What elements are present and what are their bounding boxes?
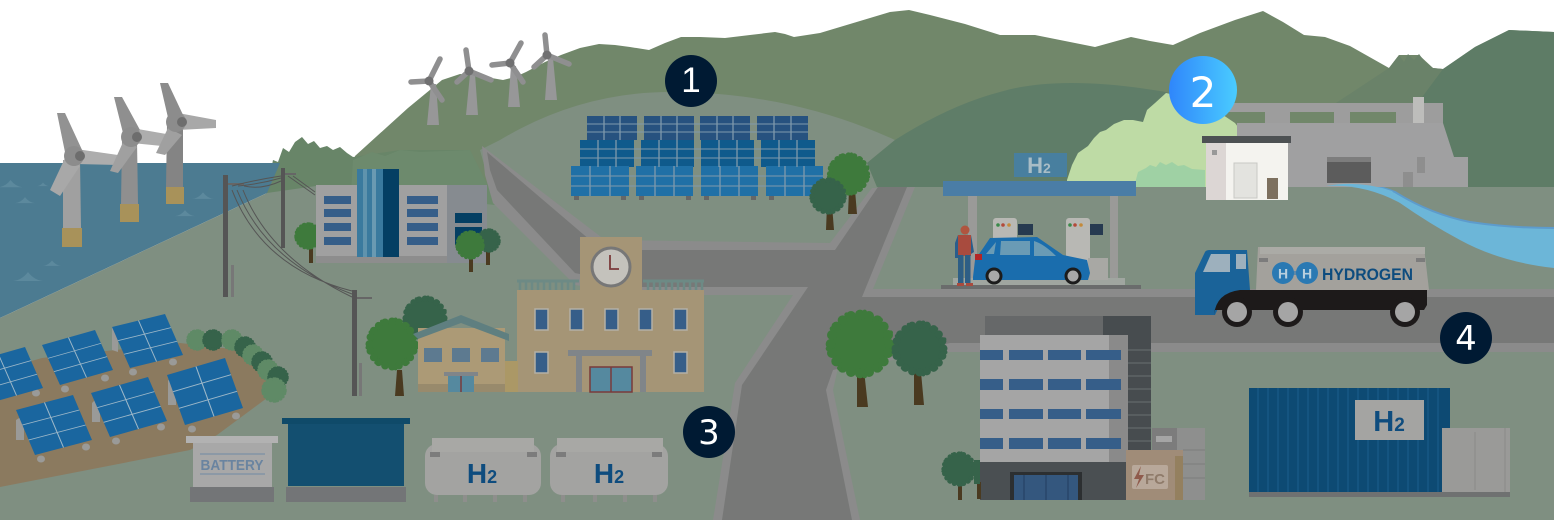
truck logo: H [1278, 266, 1288, 282]
hydrogen tank 1: H2 [467, 458, 497, 489]
river overlap at factory [1326, 184, 1400, 200]
clock [592, 248, 630, 286]
trees by office building [294, 220, 501, 272]
marker 3 [683, 406, 735, 458]
utility poles and wires [223, 168, 372, 396]
middle mountain behind factory [1336, 54, 1443, 105]
battery unit: BATTERY [200, 457, 264, 474]
blue storage unit [282, 418, 410, 502]
attendant [955, 226, 982, 286]
forest hill [265, 137, 500, 220]
hydrogen container [1249, 388, 1510, 497]
container sign: H2 [1373, 406, 1405, 438]
hydrogen tank 2: H2 [594, 458, 624, 489]
station sign: H2 [1027, 153, 1051, 178]
background mountains [355, 10, 1554, 190]
hydrogen tank 1 [425, 438, 541, 502]
factory [1226, 97, 1468, 187]
hydrogen production hut [1202, 136, 1291, 200]
grey unit [1152, 428, 1205, 500]
wind farm on hill [411, 35, 569, 125]
hillside solar array [0, 314, 289, 487]
front mountain [867, 83, 1250, 187]
small trees by tower [941, 451, 981, 500]
dispensers [993, 218, 1108, 280]
offshore wind turbine 2 [110, 97, 172, 222]
roads [482, 146, 1554, 520]
battery unit [186, 436, 278, 502]
main solar farm [571, 116, 823, 200]
marker 1 [665, 55, 717, 107]
marker 1: 1 [681, 61, 701, 100]
truck logo: H [1302, 266, 1312, 282]
panel stands [16, 327, 240, 462]
marker 2 [1169, 56, 1237, 124]
hydrogen station [941, 153, 1141, 289]
hydrogen truck [1195, 247, 1429, 327]
offshore wind turbine 3 [156, 83, 216, 204]
light green hill [1067, 93, 1244, 187]
station sign [1014, 153, 1067, 178]
fuel cell box [1126, 450, 1183, 500]
office building [316, 169, 487, 263]
truck logo: HYDROGEN [1322, 265, 1413, 284]
blue car [973, 237, 1090, 284]
river [1326, 183, 1554, 268]
marker 3: 3 [698, 413, 720, 453]
container sign [1355, 400, 1424, 440]
hydrogen tank 2 [550, 438, 668, 502]
large trees by road [826, 310, 947, 407]
marker 4 [1440, 312, 1492, 364]
fuel cell office tower [980, 316, 1205, 500]
hedge [186, 329, 289, 403]
sea [0, 163, 280, 318]
truck logo [1272, 262, 1413, 284]
sea waves [0, 180, 214, 281]
trees by solar farm [809, 152, 870, 230]
offshore wind turbine 1 [50, 113, 118, 247]
right mountain [1420, 30, 1554, 190]
town hall with clock tower [517, 237, 704, 392]
marker 4: 4 [1455, 319, 1477, 359]
house [413, 315, 518, 392]
tree and bush behind house [366, 295, 448, 396]
fuel cell box: FC [1145, 471, 1165, 488]
marker 2: 2 [1190, 68, 1216, 117]
